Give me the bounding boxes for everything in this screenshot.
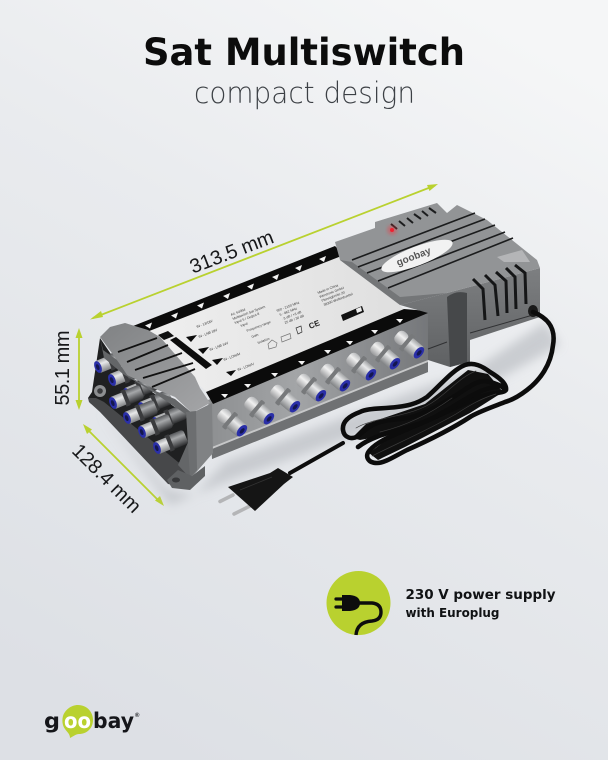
brand logo: goobay: oo [64,709,91,733]
brand logo: goobay: bay [93,709,134,733]
input labels: IN - LNB 14V [209,341,230,352]
input triangles [186,335,236,376]
input labels: IN - LNB 18V [198,328,219,339]
device shadow [100,322,560,505]
width dimension: 313.5 mm [90,184,438,320]
input section black stripe [170,337,212,369]
product specification text: Input [240,321,248,328]
side face with rear connectors [88,338,190,488]
front connectors row [213,326,428,441]
product specification text: -3 dB / +3 dB [282,310,303,321]
product specification text: Wentronic GmbH [319,286,345,299]
brand logo: goobay: g [44,709,60,733]
power supply housing [335,203,540,367]
product specification text: 950 - 2150 MHz [276,300,300,313]
cable channel [447,292,467,367]
product specification text: Isolation [257,337,270,345]
icon: plug in lime circle [326,571,390,635]
rear black strip with outputs [128,246,344,335]
height dimension: 55.1 mm: 55.1 mm [52,330,74,406]
product: sat multiswitch device [88,203,560,514]
red LED [387,225,397,235]
side vent slots [473,265,526,320]
certification marks [268,306,364,349]
input labels: IN - 13/18V [196,319,214,329]
front black strip with outputs [206,309,428,404]
input labels [196,319,255,372]
callout text: with Europlug [406,606,500,620]
width dimension: 313.5 mm: 313.5 mm [187,226,277,278]
product specification text: 38300 Wolfenbuettel [323,292,354,307]
product specification text: Made in China [317,283,339,295]
height dimension: 55.1 mm [52,328,82,410]
product specification text: Art. 64994 [230,308,246,317]
input labels: IN - LOW/H [223,352,241,362]
product specification text: 5 - 862 MHz [279,306,298,317]
brand logo: goobay [44,705,140,738]
product specification text: Input 5 / Output 8 [234,312,260,325]
certification marks: CE [307,318,322,331]
depth dimension: 128.4 mm: 128.4 mm [67,440,145,518]
top ribs [352,213,513,288]
top label panel [128,246,428,404]
europlug [220,468,293,514]
product specification text [230,283,354,345]
left end cap [100,323,213,490]
top vent slots [391,208,436,229]
front face: steel panel [208,308,428,459]
power cable [290,312,554,473]
callout text: 230 V power supply [406,587,556,603]
subtitle: compact design [194,76,415,110]
product specification text: Multiswitch Sat System [232,305,266,321]
product specification text: Gain [251,333,259,339]
title: Sat Multiswitch [143,31,465,74]
product specification text: Frequency range [246,320,271,333]
depth dimension: 128.4 mm [67,424,164,518]
product specification text: 25 dB / 30 dB [284,314,305,325]
brand logo: goobay: ® [135,712,140,719]
device logo plate: goobay [395,245,433,269]
input labels: IN - LOW/V [237,362,255,372]
device logo plate [378,234,456,278]
callout text [406,587,556,620]
product specification text: Pfennigbreite 20 [321,290,346,303]
callout: power supply [326,571,556,635]
